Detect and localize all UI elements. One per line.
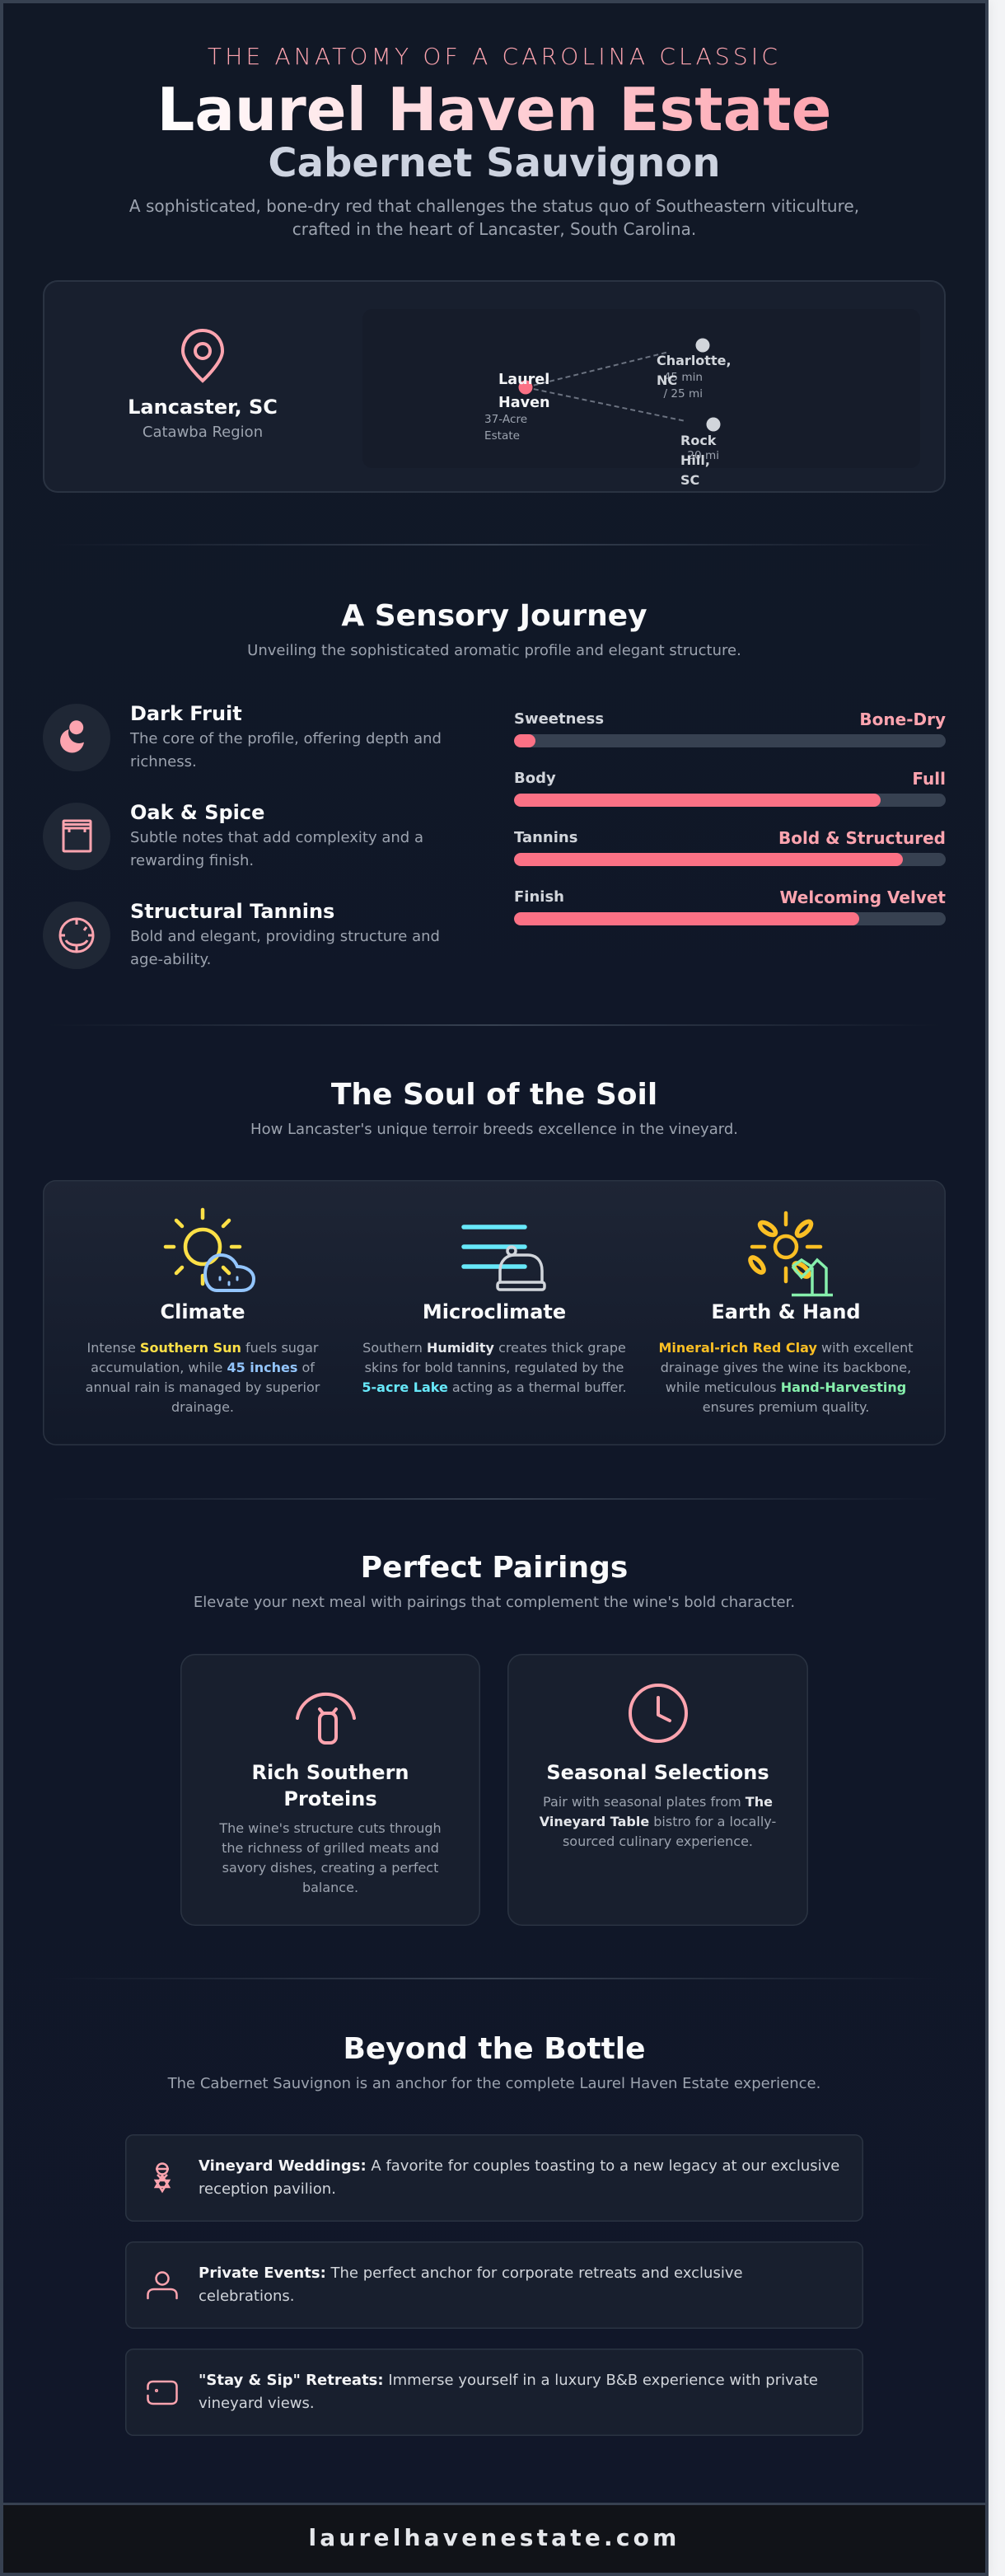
website url: laurelhavenestate.com	[308, 2524, 680, 2551]
bar track	[514, 794, 946, 807]
icon: dark fruit	[43, 704, 110, 771]
column: earth and hand	[658, 1211, 914, 1415]
section heading: pairings	[194, 1551, 795, 1611]
experience: vineyard weddings	[125, 2134, 863, 2222]
description: accumulation, while 45 inches of	[91, 1360, 315, 1375]
title: Earth & Hand	[711, 1300, 861, 1323]
description: Mineral-rich Red Clay with excellent	[658, 1340, 914, 1356]
bar: finish	[514, 888, 946, 925]
experience: private events	[125, 2241, 863, 2329]
title: Proteins	[283, 1787, 377, 1810]
section heading: beyond the bottle	[168, 2032, 820, 2092]
icon: cloche and bottle	[296, 1693, 356, 1745]
intro paragraph: A sophisticated, bone-dry red that challenges the status quo of Southeastern viticulture,	[129, 196, 859, 216]
panel: terroir	[43, 1180, 946, 1445]
label: drive time Charlotte: / 25 mi	[663, 387, 703, 400]
panel: location map	[43, 280, 946, 493]
column: climate	[86, 1208, 320, 1415]
card: seasonal selections	[507, 1654, 808, 1926]
title: Laurel Haven Estate	[157, 75, 832, 144]
text: vineyard views.	[199, 2395, 315, 2412]
description	[130, 730, 442, 770]
label: Laurel Haven: Laurel	[498, 372, 549, 388]
section: sensory journey	[43, 599, 946, 969]
description: ensures premium quality.	[703, 1399, 869, 1415]
description: Bold and elegant, providing structure and	[130, 928, 440, 945]
label: Charlotte	[657, 353, 732, 388]
heading: The Soul of the Soil	[331, 1078, 657, 1112]
title: Seasonal Selections	[546, 1761, 769, 1784]
icon: retreat card	[142, 2365, 183, 2419]
title: Climate	[160, 1300, 245, 1323]
description: drainage gives the wine its backbone,	[661, 1360, 911, 1375]
eyebrow text: THE ANATOMY OF A CAROLINA CLASSIC	[208, 43, 781, 70]
description: 5-acre Lake acting as a thermal buffer.	[362, 1379, 627, 1395]
label: 37-Acre Estate: Estate	[484, 429, 520, 443]
description	[658, 1340, 914, 1415]
description: drainage.	[171, 1399, 234, 1415]
bar: sweetness	[514, 710, 946, 747]
icon: grapes sun and hand	[748, 1211, 833, 1297]
label: Rock Hill	[680, 433, 717, 488]
location name: Lancaster, SC	[128, 396, 278, 419]
label: Sweetness	[514, 710, 604, 728]
heading: A Sensory Journey	[341, 599, 647, 633]
bar: body	[514, 769, 946, 807]
description: skins for bold tannins, regulated by the	[365, 1360, 624, 1375]
description	[130, 928, 440, 968]
description	[219, 1820, 442, 1895]
title: Oak & Spice	[130, 801, 264, 824]
icon: humidity lines and cloche	[461, 1225, 546, 1291]
description: richness.	[130, 753, 197, 770]
bar track	[514, 853, 946, 866]
value: Welcoming Velvet	[779, 888, 946, 907]
label: 37-Acre Estate: 37-Acre	[484, 413, 527, 426]
text: reception pavilion.	[199, 2180, 336, 2198]
text	[199, 2369, 818, 2415]
icon: tannins dial	[43, 902, 110, 969]
description: while meticulous Hand-Harvesting	[666, 1379, 906, 1395]
icon: oak barrel	[43, 803, 110, 870]
description	[86, 1340, 320, 1415]
intro paragraph	[129, 196, 859, 239]
label: drive time Charlotte	[663, 371, 703, 400]
bar track	[514, 912, 946, 925]
text: Vineyard Weddings: A favorite for couples toasting to a new legacy at our exclusive	[199, 2157, 839, 2175]
label: Charlotte: Charlotte,	[657, 353, 732, 368]
region name: Catawba Region	[143, 424, 263, 441]
experience: stay and sip	[125, 2349, 863, 2436]
icon: sun and rain cloud	[163, 1208, 255, 1292]
description: savory dishes, creating a perfect	[222, 1860, 438, 1876]
footer	[0, 2503, 989, 2576]
aroma: oak and spice	[43, 801, 423, 870]
icon: location pin	[181, 329, 224, 383]
label: Laurel Haven: Haven	[498, 395, 550, 411]
label: Tannins	[514, 829, 577, 846]
description	[130, 829, 423, 869]
text: "Stay & Sip" Retreats: Immerse yourself in a luxury B&B experience with private	[199, 2372, 818, 2389]
subtitle: varietal: Cabernet Sauvignon	[268, 140, 721, 186]
header	[129, 43, 859, 239]
column: microclimate	[362, 1225, 627, 1395]
text	[199, 2157, 839, 2198]
subheading: How Lancaster's unique terroir breeds excellence in the vineyard.	[250, 1121, 738, 1138]
intro paragraph: crafted in the heart of Lancaster, South Carolina.	[292, 219, 696, 239]
description: Subtle notes that add complexity and a	[130, 829, 423, 846]
value: Bone-Dry	[859, 710, 946, 729]
subheading: Elevate your next meal with pairings that complement the wine's bold character.	[194, 1594, 795, 1611]
subheading: The Cabernet Sauvignon is an anchor for the complete Laurel Haven Estate experience.	[168, 2075, 820, 2092]
label: drive time Charlotte: 45 min	[664, 371, 703, 384]
bar track	[514, 734, 946, 747]
map area	[362, 309, 920, 468]
description: Southern Humidity creates thick grape	[362, 1340, 626, 1356]
label: Body	[514, 770, 556, 787]
text: celebrations.	[199, 2288, 294, 2305]
card: rich southern proteins	[180, 1654, 480, 1926]
description: The core of the profile, offering depth and	[130, 730, 442, 747]
map routes and markers	[519, 338, 720, 432]
description: Vineyard Table bistro for a locally-	[540, 1814, 776, 1829]
description: Pair with seasonal plates from The	[543, 1794, 773, 1810]
description: Intense Southern Sun fuels sugar	[87, 1340, 318, 1356]
icon: wedding	[153, 2162, 171, 2194]
text	[199, 2262, 743, 2308]
label: distance Rock Hill: 20 mi	[687, 449, 719, 462]
description: rewarding finish.	[130, 852, 254, 869]
aroma: dark fruit	[43, 702, 442, 771]
title: Structural Tannins	[130, 900, 334, 923]
label: Finish	[514, 888, 564, 906]
value: Full	[912, 769, 946, 789]
title: Dark Fruit	[130, 702, 242, 725]
value: Bold & Structured	[778, 828, 946, 848]
heading: Beyond the Bottle	[343, 2032, 646, 2066]
description	[539, 1794, 776, 1849]
icon: clock	[629, 1684, 688, 1743]
label: Rock Hill: SC	[680, 472, 699, 488]
description: annual rain is managed by superior	[86, 1379, 320, 1395]
description	[362, 1340, 627, 1395]
title: Microclimate	[423, 1300, 566, 1323]
description: The wine's structure cuts through	[219, 1820, 442, 1836]
section: soil	[43, 1078, 946, 1445]
aroma: structural tannins	[43, 900, 440, 969]
icon: person	[142, 2258, 183, 2312]
description: balance.	[302, 1880, 358, 1895]
description: age-ability.	[130, 951, 211, 968]
label: Charlotte: NC	[657, 372, 677, 388]
title: Rich Southern	[252, 1761, 409, 1784]
label: 37-Acre Estate	[484, 413, 527, 443]
bar: tannins	[514, 828, 946, 866]
label: Rock Hill: Hill,	[680, 452, 710, 468]
text: Private Events: The perfect anchor for corporate retreats and exclusive	[199, 2265, 743, 2282]
description: the richness of grilled meats and	[222, 1840, 439, 1856]
heading: Perfect Pairings	[361, 1551, 628, 1585]
subheading: Unveiling the sophisticated aromatic profile and elegant structure.	[247, 642, 741, 659]
label: Rock Hill: Rock	[680, 433, 716, 448]
label: Laurel Haven	[498, 372, 550, 411]
title	[252, 1761, 409, 1810]
description: sourced culinary experience.	[563, 1834, 753, 1849]
